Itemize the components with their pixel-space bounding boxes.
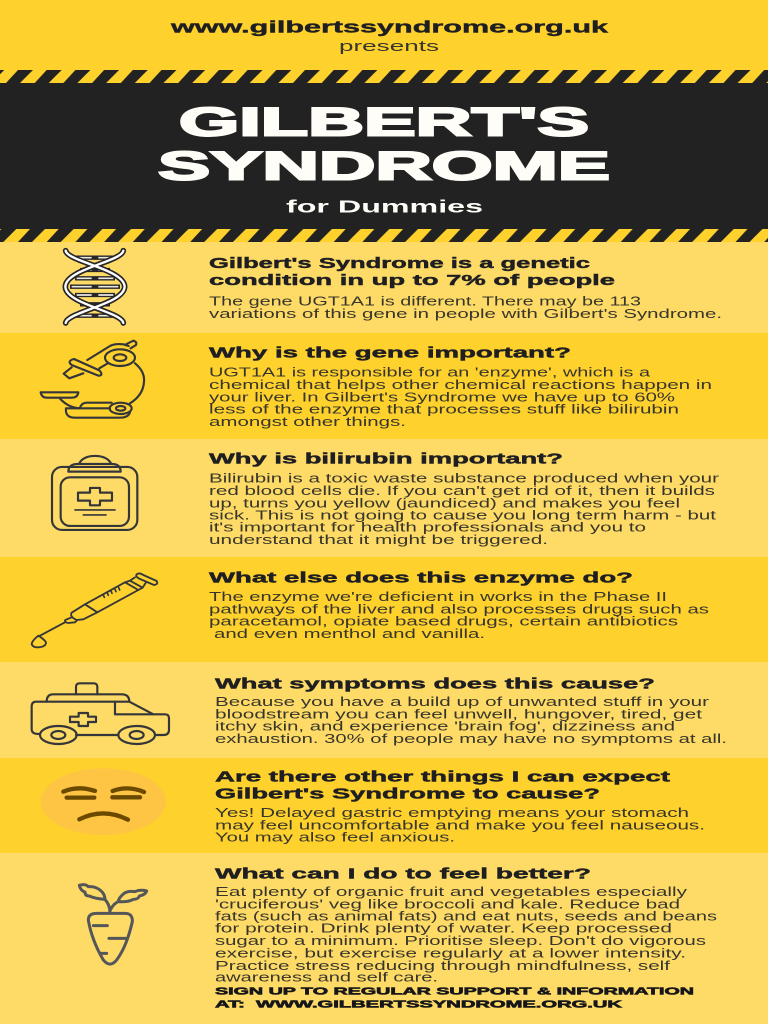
icon: medical clipboard <box>52 456 137 530</box>
text: symptoms: What symptoms does this cause? <box>215 675 655 692</box>
text: other things to expect: Are there other things I can expect <box>215 769 670 786</box>
text: what else enzyme does: paracetamol, opiate based drugs, certain antibiotics <box>209 614 679 629</box>
header: website and presents: www.gilbertssyndrome.org.uk <box>169 18 610 36</box>
text: what else enzyme does: The enzyme we're deficient in works in the Phase II <box>209 589 667 604</box>
text: genetic condition: condition in up to 7% of people <box>209 272 615 289</box>
text: other things to expect <box>215 769 705 845</box>
text: genetic condition <box>209 255 722 321</box>
title: SYNDROME <box>158 145 610 189</box>
icon: syringe <box>32 573 157 647</box>
text: why gene important: amongst other things. <box>209 414 406 429</box>
text: why gene important: chemical that helps other chemical reactions happen in <box>209 377 712 392</box>
text: genetic condition: variations of this gene in people with Gilbert's Syndrome. <box>209 306 722 321</box>
text: why gene important: UGT1A1 is responsible for an 'enzyme', which is a <box>209 365 651 380</box>
text: feel better: fats (such as animal fats) and eat nuts, seeds and beans <box>215 909 718 924</box>
panel: why gene important <box>0 333 768 439</box>
text: what else enzyme does: pathways of the liver and also processes drugs such as <box>209 601 710 616</box>
text: why bilirubin important: it's important for health professionals and you to <box>209 520 646 535</box>
text: why bilirubin important: up, turns you yellow (jaundiced) and makes you feel <box>209 495 680 510</box>
text: what else enzyme does: and even menthol and vanilla. <box>214 626 485 641</box>
text: why bilirubin important: Bilirubin is a toxic waste substance produced when your <box>209 471 720 486</box>
title banner <box>0 70 768 242</box>
title <box>158 101 610 189</box>
text: what else enzyme does: What else does this enzyme do? <box>209 569 633 586</box>
text: why bilirubin important: sick. This is not going to cause you long term harm - but <box>209 507 717 522</box>
call to action: SIGN UP TO REGULAR SUPPORT & INFORMATION <box>215 985 694 997</box>
text: genetic condition: Gilbert's Syndrome is a genetic <box>209 255 590 272</box>
text: symptoms: itchy skin, and experience 'brain fog', dizziness and <box>215 719 675 734</box>
panel: other things to expect <box>0 758 768 853</box>
call to action <box>215 985 694 1011</box>
text: symptoms: bloodstream you can feel unwell, hungover, tired, get <box>215 706 703 721</box>
text: why gene important: less of the enzyme that processes stuff like bilirubin <box>209 402 679 417</box>
panel: symptoms <box>0 662 768 758</box>
subtitle: for Dummies <box>286 197 483 217</box>
text: other things to expect: may feel uncomfortable and make you feel nauseous. <box>215 817 705 832</box>
text: feel better: 'cruciferous' veg like broccoli and kale. Reduce bad <box>215 896 680 911</box>
header: website and presents <box>169 18 610 55</box>
text: other things to expect: Gilbert's Syndrome to cause? <box>215 785 600 802</box>
text: feel better: Practice stress reducing through mindfulness, self <box>215 958 671 973</box>
text: why bilirubin important: Why is bilirubin important? <box>209 450 563 467</box>
text: what else enzyme does <box>209 569 710 641</box>
text: other things to expect: Yes! Delayed gastric emptying means your stomach <box>215 805 689 820</box>
panel: genetic condition <box>0 242 768 333</box>
panel: what else enzyme does <box>0 557 768 662</box>
text: why gene important <box>209 344 712 429</box>
text: feel better: for protein. Drink plenty of water. Keep processed <box>215 921 672 936</box>
icon: unhappy face <box>41 768 166 835</box>
icon: microscope <box>41 341 144 418</box>
icon: dna helix <box>65 251 125 323</box>
text: feel better: exercise, but exercise regularly at a lower intensity. <box>215 945 686 960</box>
panel: why bilirubin important <box>0 439 768 557</box>
call to action: AT: WWW.GILBERTSSYNDROME.ORG.UK <box>215 999 623 1011</box>
text: feel better: Eat plenty of organic fruit and vegetables especially <box>215 884 688 899</box>
text: feel better <box>215 865 718 985</box>
panel: feel better <box>0 853 768 1024</box>
text: feel better: sugar to a minimum. Prioritise sleep. Don't do vigorous <box>215 933 707 948</box>
text: why gene important: Why is the gene important? <box>209 344 571 361</box>
text: genetic condition: The gene UGT1A1 is different. There may be 113 <box>209 294 641 309</box>
text: symptoms <box>215 675 727 746</box>
text: other things to expect: You may also feel anxious. <box>215 830 455 845</box>
text: why bilirubin important: red blood cells die. If you can't get rid of it, then it builds <box>209 483 716 498</box>
text: why bilirubin important: understand that it might be triggered. <box>209 532 548 547</box>
text: feel better: awareness and self care. <box>215 970 438 985</box>
title: GILBERT'S <box>179 101 589 145</box>
text: why bilirubin important <box>209 450 720 547</box>
text: symptoms: exhaustion. 30% of people may have no symptoms at all. <box>215 731 727 746</box>
text: feel better: What can I do to feel better? <box>215 865 591 882</box>
header: website and presents: presents <box>339 39 439 55</box>
text: symptoms: Because you have a build up of unwanted stuff in your <box>215 694 710 709</box>
text: why gene important: your liver. In Gilbert's Syndrome we have up to 60% <box>209 389 676 404</box>
icon: carrot <box>79 885 147 964</box>
icon: ambulance <box>32 683 169 744</box>
